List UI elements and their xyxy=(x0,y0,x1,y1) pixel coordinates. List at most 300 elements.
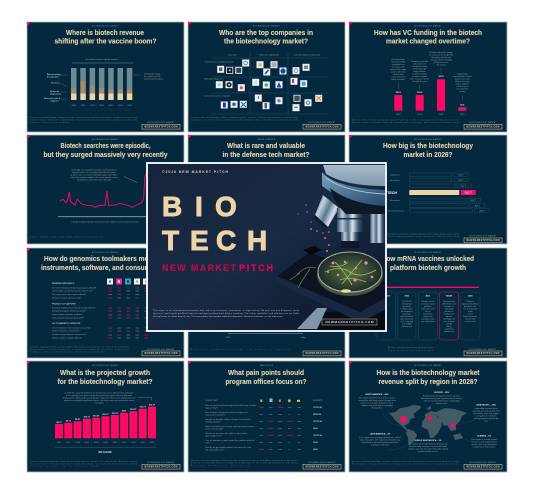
chart segment labels: Research tools & xyxy=(44,97,61,100)
cover disclaimer: This report is for informational purposes only and is not financial, investment, or legal advice. Do your own due diligence, verify xyxy=(153,309,299,312)
cover subtitle xyxy=(162,263,273,273)
footer note: Totals shown are global annual revenue for 2026 in trillions USD. xyxy=(388,235,461,238)
horizontal bar chart: Electronics xyxy=(390,199,400,202)
pain points table: CRITICAL xyxy=(313,406,323,409)
bar annotations: normalizes as xyxy=(392,64,404,66)
horizontal bar chart: Electronics xyxy=(390,179,400,182)
company grid labels: Life science tools & reagents xyxy=(204,94,230,98)
VC funding bar chart: 2022 xyxy=(396,114,401,116)
bar chart: market forecast: $8.7T xyxy=(56,422,62,424)
side note: Therapeutics lead xyxy=(144,72,160,76)
cover disclaimer xyxy=(153,309,299,318)
chart commentary: expansion and global regulatory reform, and rising consumer and private sector xyxy=(64,399,134,402)
bar annotations: Funding rebounds sharply xyxy=(429,52,453,54)
VC funding bar chart xyxy=(394,75,466,116)
panel: biotech revenue shift: BIOTECHNOLOGY MARKET xyxy=(92,24,119,28)
panel: biotech revenue shift xyxy=(27,22,184,132)
website badge: NEWMARKETPITCH.COM xyxy=(306,466,338,468)
pain points table: open without risk? xyxy=(206,434,223,438)
search commentary xyxy=(70,168,137,182)
company comparison table: Multiyear service contracts sold? xyxy=(52,296,82,299)
timeline cards: cycles lead xyxy=(465,318,475,320)
bar chart: market forecast: 2033 xyxy=(122,442,127,444)
horizontal bar chart: Computers xyxy=(390,174,400,176)
website badge: BIOTECHNOLOGY MARKET xyxy=(147,348,175,351)
timeline cards: bring xyxy=(426,311,430,313)
horizontal bar chart: $11.T xyxy=(465,191,472,195)
timeline cards: repeatable xyxy=(444,308,455,310)
axis: years: 2021 xyxy=(226,337,231,339)
heading: searches xyxy=(44,143,168,159)
bar chart: market forecast xyxy=(55,404,156,454)
pain points table xyxy=(206,398,324,452)
bar chart: market forecast: $9.5T xyxy=(75,419,81,421)
bar annotations: Rounds remain flat xyxy=(411,60,429,63)
bar annotations: clinical data xyxy=(393,73,404,76)
stacked bar chart: $ in billions revenue split by segment xyxy=(86,58,119,61)
heading: top companies: the biotechnology market? xyxy=(224,38,308,46)
footer note: Sources and methodology: public company reports, private funding announcements, market maps. xyxy=(191,116,300,119)
footer note: Biotech revenue shown on a reported basis and excludes one-time licensing and grant income items. xyxy=(30,118,139,122)
bar annotations: companies being xyxy=(412,66,427,68)
heading: market size xyxy=(383,143,473,159)
footer note: Segment shares are rounded. xyxy=(30,121,71,124)
footer note: Sources: company reports, product pages and investor presentations for each of the toolmakers. xyxy=(30,346,131,348)
timeline cards: real, unlocking xyxy=(400,321,413,323)
footer note: Values shown in trillions USD. xyxy=(30,465,101,468)
bar chart: market forecast: $13.7T xyxy=(140,406,147,408)
company comparison table: Integrated analysis software provided? xyxy=(52,310,87,313)
panel: top companies: BIOTECHNOLOGY MARKET xyxy=(253,24,280,28)
timeline cards: Companies xyxy=(444,314,454,316)
cover title: E xyxy=(190,225,209,256)
VC funding bar chart: 2023 xyxy=(417,114,423,116)
region callouts: NORTH AMERICA – 45% xyxy=(365,393,389,396)
heading: rare and valuable xyxy=(222,143,310,159)
heading: regional split: revenue split by region in 2026? xyxy=(378,379,478,386)
timeline cards: approaches deliver xyxy=(462,304,479,306)
pain points table: HIGH xyxy=(313,442,319,444)
petri dish xyxy=(317,252,383,296)
region callouts xyxy=(358,392,499,453)
heading: rare and valuable: in the defense tech market? xyxy=(222,152,310,159)
bar chart: market forecast: 9% CAGR xyxy=(98,450,112,454)
timeline cards: revenues create xyxy=(421,302,436,306)
heading: searches: Biotech searches were episodic, xyxy=(60,143,151,150)
cover title: H xyxy=(247,225,267,256)
stacked bar chart: 2021 xyxy=(71,105,77,107)
bar annotations: data as the year xyxy=(455,80,470,83)
region callouts: This region has a growing patient base, clinical xyxy=(359,436,401,439)
website badge xyxy=(303,121,341,129)
heading: revenue shift xyxy=(54,30,156,46)
panel: biotech searches xyxy=(27,135,184,244)
heading: VC funding: How has VC funding in the biotech xyxy=(374,30,482,37)
company comparison table xyxy=(52,278,149,339)
timeline cards: lifting xyxy=(447,325,451,328)
timeline cards: future xyxy=(468,312,474,316)
timeline cards: scale becomes xyxy=(400,318,413,320)
cover title: I xyxy=(195,191,203,222)
pain points table: QUESTIONS xyxy=(206,400,218,402)
company comparison table: Instrument leasing or financing programs offered? xyxy=(52,286,97,290)
company comparison table: Consumables priced by reaction sold per run? xyxy=(52,290,94,293)
region callouts: opportunities xyxy=(436,402,447,405)
region callouts: supporting increased demand and access xyxy=(361,441,399,444)
region callouts: ecosystem with deep capital, strong talent xyxy=(358,399,396,402)
region callouts: ASIA-PACIFIC – 20% xyxy=(476,404,496,406)
region callouts: support and leadership in emerging xyxy=(361,404,393,407)
pain points table: How do we regulate safely and lower the cost from xyxy=(206,418,251,421)
region callouts: systems and new manufacturing hubs driving xyxy=(408,448,448,450)
bar annotations: with fewer new xyxy=(413,62,427,66)
region callouts: biomanufacturing and regional biotech clusters xyxy=(421,397,462,400)
timeline cards: The focus has xyxy=(443,301,455,303)
timeline cards: 2020 xyxy=(404,296,410,298)
footer note xyxy=(30,460,139,468)
timeline arrow xyxy=(350,286,479,288)
region callouts: system with local companies xyxy=(471,443,497,446)
website badge: BIOTECHNOLOGY MARKET xyxy=(147,461,175,464)
website badge: BIOTECHNOLOGY MARKET xyxy=(308,121,336,124)
website badge: NEWMARKETPITCH.COM xyxy=(466,126,500,128)
timeline cards: across new xyxy=(423,316,433,318)
horizontal bar chart: BIOTECH xyxy=(381,191,397,195)
website badge: BIOTECHNOLOGY MARKET xyxy=(147,121,175,124)
heading: VC funding: market changed overtime? xyxy=(386,38,470,46)
chart segment labels: Biotechnology xyxy=(47,73,62,76)
horizontal bar chart: $11.T xyxy=(461,186,467,188)
plant tendrils xyxy=(290,267,316,288)
region callouts: to biologic medicines xyxy=(371,444,389,446)
region callouts: competing in select areas xyxy=(473,446,495,448)
heading: top companies: Who are the top companies in xyxy=(219,30,313,37)
website badge: NEWMARKETPITCH.COM xyxy=(144,126,178,128)
bar chart: market forecast: $11.1T xyxy=(102,414,109,416)
bar annotations: on mega-rounds for AI drug xyxy=(429,54,453,56)
footer note: Sources and methodology: compiled from Precedence, Grand View and Fortune Business reports. xyxy=(30,460,139,463)
search commentary: big promises about the future of health xyxy=(77,178,111,182)
bar annotations: the market xyxy=(436,64,446,66)
bar annotations: discovery, obesity and xyxy=(431,56,451,59)
VC funding bar chart: $23.8 xyxy=(396,92,402,94)
VC funding bar chart: 2024 xyxy=(439,114,444,116)
company grid labels: Molecular diagnostics xyxy=(204,78,224,80)
website badge: BIOTECHNOLOGY MARKET xyxy=(469,121,497,124)
heading: mRNA xyxy=(382,256,474,272)
panel: biotech searches: BIOTECHNOLOGY MARKET xyxy=(92,138,119,141)
cover subtitle: PITCH xyxy=(239,263,273,273)
stacked bar chart: 2024 xyxy=(99,105,105,107)
timeline cards: in the xyxy=(468,310,474,313)
timeline cards: oncology and xyxy=(443,318,455,320)
panel: market size: BIOTECHNOLOGY MARKET xyxy=(414,138,442,141)
region callouts: local policy make this region xyxy=(473,412,499,415)
cover eyebrow: ©2026 NEW MARKET PITCH xyxy=(162,170,229,174)
website badge: BIOTECHNOLOGY MARKET xyxy=(469,234,497,238)
region callouts: This region is a small market xyxy=(471,438,497,441)
website badge xyxy=(142,121,180,129)
bar chart: market forecast: 2031 xyxy=(103,442,109,444)
region callouts: OCEANIA – 1% xyxy=(477,434,491,438)
timeline cards: expansion and xyxy=(421,308,434,310)
cover title: B xyxy=(162,191,182,222)
search trend line chart xyxy=(58,172,147,224)
timeline cards: therapies over xyxy=(464,305,477,308)
heading: genomics toolmakers xyxy=(41,256,171,272)
microscope illustration xyxy=(277,165,385,330)
timeline cards: TODAY xyxy=(446,294,453,298)
panel: top companies xyxy=(188,22,345,132)
footer note: Ratings shown are indicative. xyxy=(191,464,252,467)
region callouts: and high growth opportunity xyxy=(474,417,498,420)
timeline cards: validate rapid xyxy=(401,308,413,310)
stacked bar chart: 2027 xyxy=(127,105,133,107)
panel: mRNA platform timeline xyxy=(349,248,507,358)
world map xyxy=(388,405,467,445)
region callouts: area xyxy=(484,420,489,422)
company grid labels: Instrumentation & automation xyxy=(294,54,320,56)
bar annotations: names and early xyxy=(455,78,470,80)
VC funding bar chart: 2025 xyxy=(460,114,465,116)
search commentary: or gone viral, e.g. vaccine breakthroughs, and further xyxy=(71,174,118,176)
heading: projected growth: What is the projected growth xyxy=(60,370,150,377)
pain points table: CRITICAL xyxy=(313,434,323,437)
pain points table: lab and facility rules? xyxy=(206,448,225,452)
bar chart: market forecast: $9.1T xyxy=(66,420,72,422)
heading: genomics toolmakers: How do genomics toolmakers monetize xyxy=(44,256,167,263)
footer note: Sources: company filings and industry reports. xyxy=(191,348,292,351)
timeline cards: emergency xyxy=(402,304,412,306)
timeline cards: and large xyxy=(403,314,412,316)
region callouts: greater market access xyxy=(418,450,438,453)
timeline cards: to new value xyxy=(465,320,477,323)
bar annotations: Post-pandemic xyxy=(392,58,405,61)
bar chart: market forecast: 2035 xyxy=(140,442,146,444)
bar chart: market forecast: 2026 xyxy=(57,442,62,444)
timeline cards: 2017 xyxy=(386,296,391,298)
timeline cards: platform xyxy=(424,305,432,308)
bar annotations: biotech funding xyxy=(392,60,405,64)
website badge: BIOTECHNOLOGY MARKET xyxy=(469,348,497,351)
timeline cards: COVID-19 xyxy=(402,301,412,303)
pain points table: existing systems? xyxy=(206,420,222,424)
chart commentary: driving growth. Efficient discovery, greater support for clinical trials, biomanufacture xyxy=(62,396,137,400)
heading: market size: How big is the biotechnology xyxy=(383,143,473,150)
website badge: NEWMARKETPITCH.COM xyxy=(144,352,178,355)
region callouts: therapeutics xyxy=(372,406,382,410)
chart segment labels: Vaccines xyxy=(51,82,60,84)
heading: projected growth: for the biotechnology market? xyxy=(58,379,152,386)
company comparison table: GO-TO-MARKET & SERVICES xyxy=(52,322,81,325)
heading: pain points: What pain points should xyxy=(228,370,304,377)
company comparison table: Full-stack workflow from sample to data offering? xyxy=(52,306,96,310)
axis: years: Today xyxy=(300,337,306,339)
company comparison table: REVENUE MECHANICS xyxy=(52,282,75,285)
company comparison table: PRODUCT & PLATFORM xyxy=(52,302,76,305)
bar annotations: assets with clear xyxy=(391,70,406,74)
heading: revenue shift: shifting after the vaccine boom? xyxy=(54,38,156,46)
footer note xyxy=(388,346,435,352)
stacked bar chart: 2023 xyxy=(90,105,95,107)
panel: cover slide xyxy=(147,163,386,331)
bar annotations: Capital stays xyxy=(457,72,468,76)
chart commentary: investment xyxy=(94,402,104,404)
region callouts: LATIN AMERICA – 3% xyxy=(370,432,391,436)
footer note: Estimates are based on analyst consensus and company filings across sectors. xyxy=(388,232,461,236)
bar annotations: through the year xyxy=(412,80,427,83)
footer note xyxy=(191,459,300,467)
cover disclaimer: for any losses or claims from its use. This report does not consider individual objectives, financial situations, or risk tolerances. xyxy=(153,315,283,318)
region callouts: EUROPE – 25% xyxy=(434,392,449,394)
footer note: Source: Google Trends. Data shown relative to peak interest. xyxy=(30,236,105,238)
panel: defense tech: VALUE CREATION xyxy=(258,138,276,141)
horizontal bar chart: Financial services xyxy=(388,210,404,212)
pain points table: MEDIUM xyxy=(313,414,321,416)
chart segment labels: therapeutics xyxy=(47,76,60,78)
website badge xyxy=(464,348,502,356)
timeline cards: platform era xyxy=(401,325,413,328)
website badge: NEWMARKETPITCH.COM xyxy=(466,239,500,242)
panel: projected growth: BIOTECHNOLOGY MARKET xyxy=(92,364,119,367)
side note: and remain the driver xyxy=(144,78,163,80)
heading: mRNA: platform biotech growth xyxy=(390,265,466,272)
company comparison table: Recurring cloud subscriptions offered? xyxy=(52,293,87,296)
chart commentary: In 2026 the value the market is set to generate across all biotech is estimated xyxy=(65,392,133,394)
region callouts: The region has smaller biotech infrastructure xyxy=(408,442,449,446)
heading: top companies xyxy=(219,30,313,46)
bar annotations: from crossover funds xyxy=(410,78,429,80)
horizontal bar chart: $14.T xyxy=(479,210,485,212)
footer note: Venture data reflects disclosed equity financing rounds; late-stage totals include crossover. xyxy=(352,118,461,122)
bar chart: market forecast: $11.6T xyxy=(112,413,119,415)
panel: regional revenue xyxy=(349,361,507,472)
timeline cards: approvals xyxy=(402,306,411,308)
pain points table: use? xyxy=(206,442,211,444)
heading: projected growth xyxy=(58,370,152,386)
website badge: NEWMARKETPITCH.COM xyxy=(466,352,500,355)
pain points table: in the relevant field? xyxy=(206,428,224,430)
panel: market size xyxy=(349,135,507,244)
panel: pain points: PAIN POINTS xyxy=(260,364,274,367)
cover title xyxy=(162,191,267,256)
VC funding bar chart: $5.9 xyxy=(460,105,465,107)
heading: regional split: How is the biotechnology market xyxy=(376,370,480,377)
heading: mRNA: How mRNA vaccines unlocked xyxy=(382,256,474,263)
panel: pain points xyxy=(188,361,345,472)
pain points table: How much better and cheaper must be vendors quotes xyxy=(206,425,254,428)
chart commentary xyxy=(62,392,152,404)
cover title: O xyxy=(215,191,237,222)
panel: value creation timeline behind cover xyxy=(188,248,345,358)
heading: market size: market in 2026? xyxy=(404,152,452,159)
chart commentary: to rise steadily each year through the period with capital and new therapies xyxy=(66,394,132,397)
bar chart: market forecast: $12T xyxy=(122,410,127,412)
bar annotations: next generation modality xyxy=(430,58,452,62)
footer note xyxy=(352,460,461,466)
company grid labels: Therapeutics & engineering tools xyxy=(204,60,234,64)
footer note xyxy=(388,232,461,238)
bar annotations: to attract capital xyxy=(413,75,427,78)
timeline cards: momentum xyxy=(444,330,454,333)
bar annotations: paths to market xyxy=(391,78,406,81)
company comparison table: Partner network for distribution? xyxy=(52,330,81,333)
VC funding bar chart: $23.8 xyxy=(417,92,423,94)
heading: VC funding xyxy=(374,30,482,46)
horizontal bar chart: $13.T xyxy=(475,205,481,207)
search commentary: Generally, most people have been searching about xyxy=(71,168,117,172)
region callouts: with increasing collaboration and funding xyxy=(424,400,460,402)
bar chart: market forecast: 2032 xyxy=(113,442,118,444)
timeline cards: pursue xyxy=(446,316,453,318)
heading: revenue shift: Where is biotech revenue xyxy=(66,30,144,37)
cover title: T xyxy=(162,225,179,256)
website badge xyxy=(322,319,377,325)
pain points table: HIGH xyxy=(313,449,319,451)
cover title: C xyxy=(216,225,236,256)
bar chart: market forecast: $14.7T xyxy=(149,404,156,406)
stacked bar chart: 2026 xyxy=(118,105,123,107)
footer note: Timeline dates are approximate. xyxy=(388,349,435,352)
timeline cards: development xyxy=(401,310,413,313)
timeline cards: new indications xyxy=(421,320,435,323)
region callouts: Europe holds strong positions in vaccines, xyxy=(423,394,461,398)
region callouts: but has a well regarded trial xyxy=(472,440,497,444)
bar chart: market forecast: 2036 xyxy=(150,442,155,444)
timeline cards: 2021 xyxy=(426,296,431,298)
chart segment labels: reagents xyxy=(50,100,59,102)
panel: projected growth xyxy=(27,361,184,472)
cover disclaimer: key facts, and consult qualified financial and legal professionals before investing. The author, publisher, and affiliates are not liable xyxy=(153,312,299,315)
bar chart: market forecast: 2034 xyxy=(131,442,137,444)
website badge xyxy=(464,461,502,469)
region callouts: but with rising investment in national health xyxy=(409,445,447,448)
footer note: Companies are illustrative examples and the placement does not imply a ranking of any kind. xyxy=(191,118,300,122)
company comparison table: Clinical grade assay products sold? xyxy=(52,316,84,319)
chart segment labels: Molecular xyxy=(50,91,60,93)
region callouts: capacity, growing markets and xyxy=(473,410,499,412)
chart segment labels: diagnostics xyxy=(50,92,62,96)
pain points table: How do we get reliable product that meets the order xyxy=(206,446,252,449)
pain points table: How do we measure data rights so they remain xyxy=(206,432,247,435)
footer note: Severity is assessed from the frequency of mentions in the evaluated documents and reports. xyxy=(191,462,300,464)
panel: VC funding xyxy=(349,22,507,132)
pain points table: How to keep a full pipeline between stages and xyxy=(206,411,247,414)
bar annotations: rounds continue xyxy=(413,72,428,76)
website badge xyxy=(464,121,502,129)
pain points table: Can we mandate an open model that vendors adopt for xyxy=(206,439,255,442)
website badge: PROGRAM OFFICE MARKET xyxy=(308,461,336,464)
horizontal bar chart: $12.T xyxy=(458,174,464,176)
region callouts: trial participation and regulatory strengthening xyxy=(360,438,400,442)
stacked bar chart xyxy=(71,58,133,107)
pain points table: HIGH xyxy=(313,428,319,430)
side note xyxy=(134,72,163,80)
region callouts: an important contributor xyxy=(475,414,497,418)
website badge: NEWMARKETPITCH.COM xyxy=(466,466,500,468)
stacked bar chart: 2025 xyxy=(109,105,114,107)
company comparison table: Growth in large biobank contract wins? xyxy=(52,333,87,336)
bar chart: market forecast: $10.1T xyxy=(84,416,91,418)
website badge: NEWMARKETPITCH.COM xyxy=(326,320,374,324)
footer note: Figures shown in billions USD and exclude public offerings, debt and grant funding rounds. xyxy=(352,121,461,124)
timeline cards: Platform xyxy=(467,300,474,303)
timeline cards: biomanufacture xyxy=(463,315,478,318)
heading: pain points: program offices focus on? xyxy=(226,379,306,386)
footer note: Sources and methodology: regional shares estimated from market research and company filings. xyxy=(352,460,461,463)
region callouts: Expanding manufacturing xyxy=(475,407,497,410)
panel: genomics toolmakers xyxy=(27,248,184,358)
